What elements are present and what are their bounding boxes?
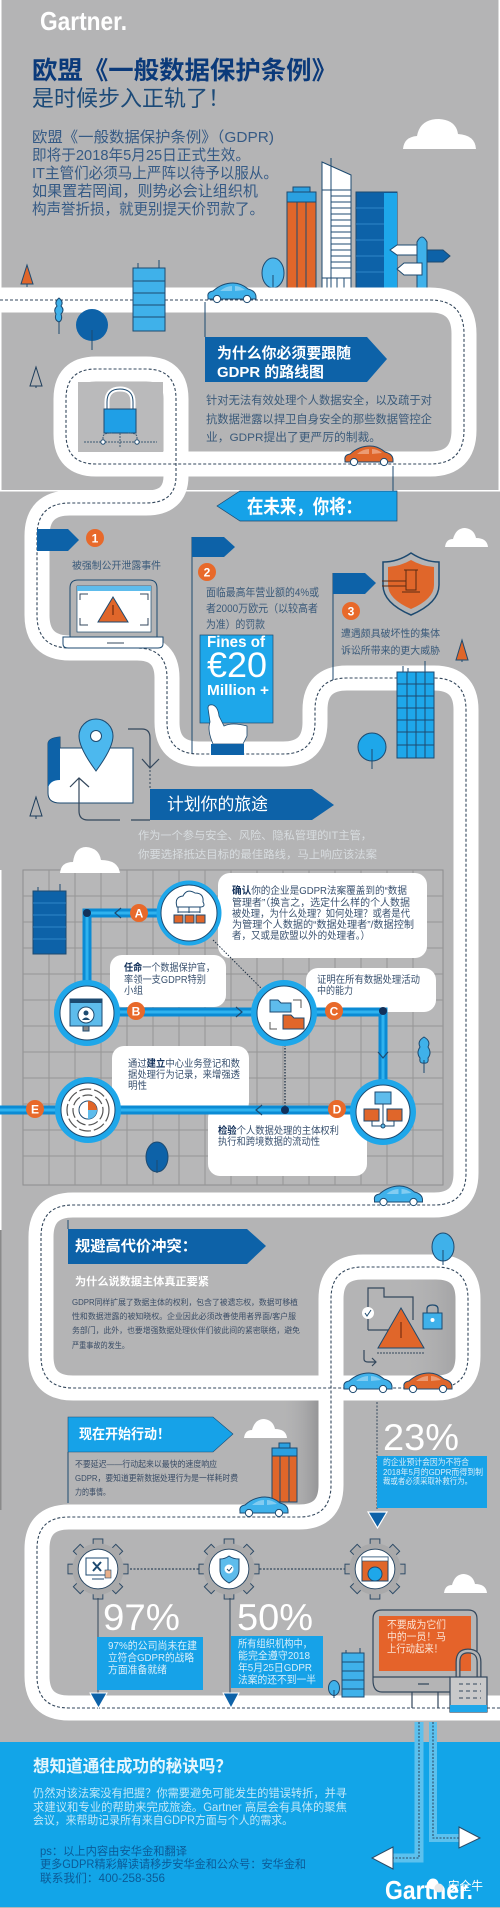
stat: 23%: 裁或者必须采取补救行为。 (383, 1476, 472, 1486)
icon: map with pin (48, 719, 159, 820)
item 1: public disclosure (37, 529, 163, 648)
bubble B: 任命一个数据保护官， (124, 961, 215, 974)
badges A-E: D (333, 1102, 342, 1116)
text: act now: GDPR，要知道更新数据处理行为是一样耗时费 (75, 1473, 238, 1483)
connector: gears dotted line (130, 1568, 345, 1570)
white road (0, 300, 500, 1708)
pipeline: blue path A to E (0, 908, 388, 1115)
footer contact text: 更多GDPR精彩解读请移步安华金和公众号：安华金和 (40, 1857, 306, 1871)
stat: 23%: 23% (383, 1417, 459, 1458)
stat: 97%: 97%的公司尚未在建 (108, 1639, 197, 1652)
stat: 23%: 2018年5月的GDPR而得到制 (383, 1467, 483, 1477)
stat: 23% (368, 1402, 487, 1528)
icon: beaded tree (418, 1037, 430, 1073)
icon: grid building (397, 661, 434, 758)
bubble A: 被处理，为什么处理？如何处理？或者是代 (232, 907, 411, 920)
text: act now (75, 1459, 238, 1497)
text: why roadmap: 针对无法有效处理个人数据安全，以及疏于对 (206, 393, 432, 407)
text: why roadmap: 业，GDPR提出了更严厉的制裁。 (206, 430, 381, 444)
stat: 50%: 法案的还不到一半 (238, 1673, 316, 1686)
header logo: Gartner. (40, 6, 127, 36)
gear 2: shield (199, 1539, 259, 1599)
intro text: 欧盟《一般数据保护条例》（GDPR) (32, 129, 274, 146)
stat: 97%: 立符合GDPR的战略 (108, 1651, 194, 1664)
icon: orange building (287, 187, 316, 288)
text: data subjects: GDPR同样扩展了数据主体的权利，包含了被遗忘权，数据可移植 (72, 1297, 298, 1307)
arrows: road exit pipes (372, 1722, 480, 1869)
icon: orange tree 2 (456, 640, 468, 662)
car: orange 2 (404, 1373, 452, 1393)
item 1: public disclosure: 被强制公开泄露事件 (72, 559, 161, 572)
flag: plan your journey (150, 789, 334, 820)
flag: in the future (217, 466, 397, 521)
node A: cloud servers (156, 880, 222, 946)
footer heading: 想知道通往成功的秘诀吗？ (33, 1756, 232, 1776)
stat: 50%: 所有组织机构中， (238, 1637, 312, 1650)
bubble A: 确认你的企业是GDPR法案覆盖到的“数据 (232, 884, 407, 897)
flag: why roadmap: 为什么你必须要跟随 (217, 344, 351, 362)
badges A-E (26, 904, 346, 1118)
icon: small building and tree (328, 1648, 364, 1698)
gear 3: settings window (345, 1539, 405, 1599)
footer contact text (40, 1844, 306, 1885)
icon: small cloud (445, 528, 488, 547)
badges A-E: A (135, 906, 144, 920)
panel shading (280, 1278, 457, 1506)
icon: orange building 2 (272, 1443, 297, 1502)
icon: outline tree 2 (30, 797, 42, 819)
icon: dark round tree (76, 309, 108, 350)
icon: light tree (262, 258, 284, 288)
text: why roadmap: 抗数据泄露以捍卫自身安全的那些数据管控企 (206, 412, 432, 426)
watermark (428, 1878, 483, 1893)
icon: sky-blue building (133, 260, 165, 331)
bubble B: 小组 (124, 984, 143, 997)
flag: act now: 现在开始行动！ (79, 1426, 170, 1442)
icon: padlock (78, 382, 163, 452)
flag: why roadmap: GDPR 的路线图 (217, 363, 324, 381)
icon: cloud 4 (444, 1574, 487, 1593)
item 2: fines: 为准）的罚款 (206, 617, 265, 631)
icon: monitor with warning message: 不要成为它们 (387, 1618, 446, 1631)
bubble A: 为管理个人数据的“数据处理者”/数据控制 (232, 918, 414, 931)
flag: plan your journey: 计划你的旅途 (167, 795, 268, 814)
stat: 50%: 50% (237, 1597, 313, 1638)
stat: 97%: 97% (103, 1597, 180, 1638)
text: plan description (138, 828, 377, 861)
bubble C: 中的能力 (317, 984, 353, 997)
text: plan description: 作为一个参与安全、风险、隐私管理的IT主管， (138, 828, 372, 842)
bubble D: 检验个人数据处理的主体权利 (218, 1124, 339, 1137)
intro text: IT主管们必须马上严阵以待予以服从。 (32, 165, 278, 182)
flag: why roadmap (205, 302, 387, 382)
bubble C: 证明在所有数据处理活动 (317, 973, 420, 986)
bubble A: 者，又或是欧盟以外的处理者。） (232, 929, 370, 942)
item 2: fines: Fines of (207, 634, 266, 651)
icon: small beaded tree (55, 298, 63, 334)
flag: avoid conflict (68, 1220, 266, 1264)
footer logo: Gartner. (385, 1875, 473, 1905)
intro text (32, 129, 278, 218)
bubble B: 率领一支GDPR特别 (124, 973, 206, 986)
bubble A: 管理者”（换言之，选定什么样的个人数据 (232, 896, 410, 909)
title (32, 57, 337, 111)
stat: 50%: 能完全遵守2018 (238, 1649, 310, 1662)
item 3: lawsuits: 3 (348, 604, 355, 618)
text: plan description: 你要选择抵达目标的最佳路线，马上响应该法案 (138, 847, 377, 861)
node C: folders (251, 980, 317, 1046)
flag: act now (68, 1417, 233, 1503)
footer contact text: ps：以上内容由安华金和翻译 (40, 1844, 187, 1858)
grid panel (23, 870, 443, 1185)
footer panel (0, 1742, 500, 1907)
gear 1: monitor (68, 1539, 128, 1599)
text: act now: 力的事情。 (75, 1487, 110, 1497)
item 2: fines: 2 (204, 566, 211, 580)
bubble D (208, 1106, 367, 1176)
text: why roadmap (206, 393, 432, 444)
bubble E: 据处理行为记录，来增强透 (128, 1068, 240, 1081)
item 3: lawsuits: 诉讼所带来的更大威胁 (341, 644, 440, 657)
bubble C (306, 968, 436, 1012)
title: 欧盟《一般数据保护条例》 (32, 57, 337, 85)
bubble A (218, 873, 427, 958)
watermark: 安全牛 (448, 1878, 483, 1893)
item 2: fines: 者2000万欧元（以较高者 (206, 601, 318, 615)
stat: 50%: 年5月25日GDPR (238, 1661, 312, 1674)
icon: dark building (33, 884, 66, 954)
icon: orange tree (21, 265, 33, 287)
icon: white tower (322, 158, 351, 288)
icon: dark tree (146, 1142, 168, 1173)
footer body text (33, 1786, 347, 1827)
icon: cloud (403, 119, 476, 149)
text: act now: 不要延迟——行动起来以最快的速度响应 (75, 1459, 217, 1469)
subheading: data subjects: 为什么说数据主体真正要紧 (75, 1274, 209, 1288)
icon: blue building (356, 192, 397, 288)
stat: 97% (90, 1597, 203, 1708)
item 1: public disclosure: 1 (92, 532, 99, 546)
flag: in the future: 在未来，你将： (247, 496, 362, 518)
car: blue 2 (374, 1186, 422, 1206)
node D: network (350, 1079, 416, 1145)
item 3: lawsuits: 遭遇颇具破坏性的集体 (341, 627, 440, 640)
footer contact text: 联系我们：400-258-356 (40, 1871, 165, 1885)
intro text: 如果置若罔闻，则势必会让组织机 (32, 183, 258, 200)
flag: avoid conflict: 规避高代价冲突： (75, 1237, 197, 1255)
item 3: lawsuits (333, 553, 440, 680)
icon: outline tree (30, 367, 42, 388)
text: data subjects (72, 1297, 300, 1350)
item 2: fines: 面临最高年营业额的4%或 (206, 585, 319, 599)
node B: officer (54, 980, 120, 1046)
connector: dotted links (213, 940, 285, 1110)
car: blue 4 (240, 1497, 288, 1517)
icon: padlock on monitor (450, 1651, 487, 1712)
footer body text: 仍然对该法案没有把握？你需要避免可能发生的错误转折，并寻 (33, 1786, 347, 1800)
icon: light tree 2 (432, 1233, 454, 1265)
badges A-E: C (330, 1004, 339, 1018)
item 2: fines: Million + (207, 682, 269, 699)
item 2: fines (192, 537, 319, 755)
badges A-E: B (132, 1004, 141, 1018)
text: data subjects: 严重事故的发生。 (72, 1340, 129, 1350)
stat: 23%: 的企业预计会因为不符合 (383, 1457, 469, 1467)
footer body text: 求建议和专业的帮助来完成旅途。Gartner 高层会有具体的聚焦 (33, 1800, 347, 1814)
node E: target (55, 1077, 121, 1143)
footer body text: 会议，来帮助记录所有来自GDPR方面与个人的需求。 (33, 1813, 293, 1827)
icon: monitor with warning message (373, 1610, 477, 1708)
icon: monitor with warning message: 上行动起来！ (387, 1642, 443, 1655)
text: data subjects: 务部门，此外，也要增强数据处理伙伴们彼此间的紧密联络，避免 (72, 1325, 300, 1335)
icon: mid cloud (60, 847, 120, 873)
intro text: 构声誉折损，就更别提天价罚款了。 (32, 200, 264, 218)
text: data subjects: 性和数据泄露的被知晓权。企业因此必须改善使用者界面/客户服 (72, 1311, 296, 1321)
bubble E: 通过建立中心业务登记和数 (128, 1057, 240, 1070)
bubble D: 执行和跨境数据的流动性 (218, 1135, 320, 1148)
stat: 50% (223, 1597, 323, 1708)
car: blue (208, 283, 256, 303)
stat: 97%: 方面准备就绪 (108, 1663, 167, 1676)
icon: monitor with warning message: 中的一员！马 (387, 1630, 446, 1643)
item 2: fines: €20 (207, 646, 267, 685)
icon: signpost (390, 237, 450, 288)
car: blue 3 (344, 1373, 392, 1393)
icon: warning with folder (362, 1288, 442, 1366)
bubble B (110, 955, 226, 1007)
icon: round tree (358, 733, 386, 769)
title: 是时候步入正轨了！ (32, 86, 230, 111)
car: orange (345, 446, 393, 466)
badges A-E: E (31, 1102, 39, 1116)
intro text: 即将于2018年5月25日正式生效。 (32, 147, 250, 164)
bubble E (112, 1046, 249, 1114)
bubble E: 明性 (128, 1079, 147, 1092)
icon: cloud 3 (244, 1419, 287, 1438)
